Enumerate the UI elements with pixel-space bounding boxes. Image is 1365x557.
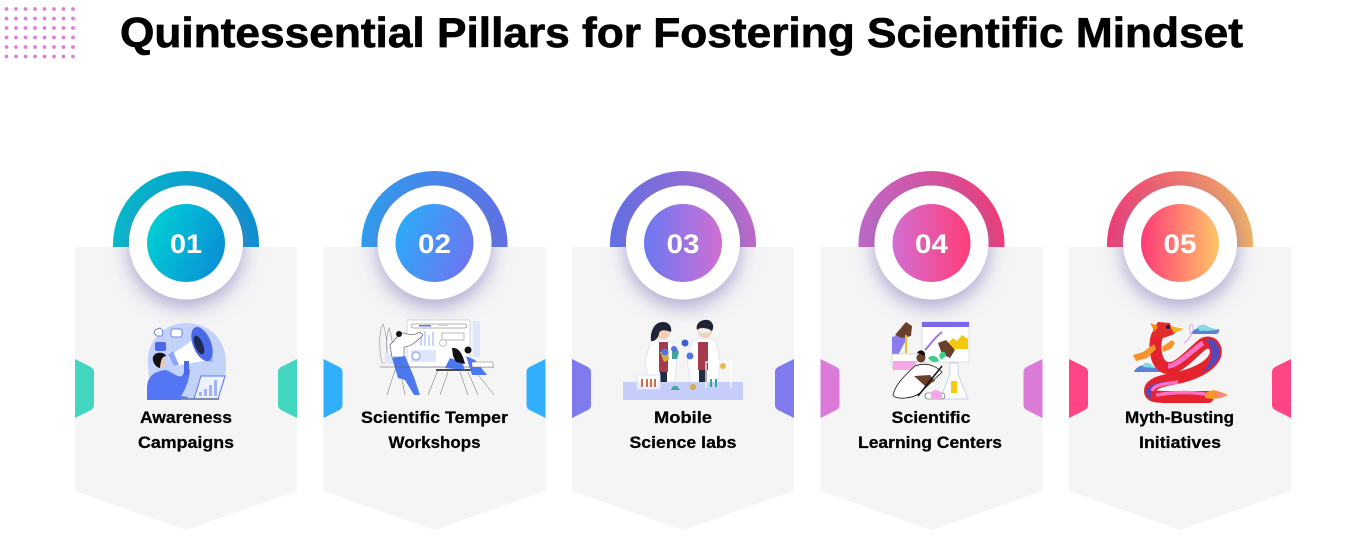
side tab right 03: [775, 359, 794, 418]
side tab right 02: [526, 359, 546, 418]
number badge 04: [874, 186, 988, 300]
icon: two scientists in a lab: [623, 320, 743, 400]
gradient arc 03: [610, 171, 756, 248]
number badge 02: 02: [418, 229, 451, 259]
number badge 02: [378, 186, 492, 300]
panel: pillar 04 scientific learning centers: [820, 171, 1042, 530]
number badge 04: 04: [915, 229, 948, 259]
icon: lab research with plant and flask: [892, 322, 969, 399]
label 01: Campaigns: [138, 434, 234, 452]
panel: pillar 01 awareness campaigns: [75, 171, 297, 530]
card 03: [572, 247, 794, 530]
label 03: Science labs: [630, 434, 736, 452]
label 03: Mobile: [654, 409, 712, 427]
title: Quintessential Pillars for Fostering Scientific Mindset: [120, 9, 1243, 56]
gradient arc 04: [858, 171, 1004, 248]
card 02: [324, 247, 546, 530]
label 01: Awareness: [140, 409, 232, 427]
card 04: [820, 247, 1042, 530]
icon: person with megaphone: [147, 323, 226, 400]
panel: pillar 03 mobile science labs: [572, 171, 794, 530]
side tab left 04: [820, 359, 840, 418]
number badge 05: [1123, 186, 1237, 300]
label 01: [138, 409, 234, 452]
side tab left 02: [324, 359, 342, 418]
panel: pillar 02 scientific temper workshops: [324, 171, 546, 530]
label 04: [858, 409, 1002, 452]
icon: workshop presentation: [380, 320, 494, 395]
number badge 01: 01: [170, 229, 202, 259]
number badge 03: 03: [666, 229, 700, 259]
gradient arc 01: [113, 171, 259, 248]
icon: dragon: [1133, 322, 1228, 399]
label 02: Scientific Temper: [361, 409, 509, 427]
side tab left 01: [75, 359, 94, 418]
side tab right 05: [1272, 359, 1291, 418]
label 04: Learning Centers: [858, 434, 1002, 452]
number badge 05: 05: [1164, 229, 1196, 259]
label 03: [630, 409, 736, 452]
side tab right 04: [1024, 359, 1042, 418]
decorative dot grid: [5, 7, 75, 58]
side tab left 05: [1069, 359, 1088, 418]
number badge 01: [129, 186, 243, 300]
label 05: Myth-Busting: [1125, 409, 1234, 427]
side tab left 03: [572, 359, 591, 418]
label 04: Scientific: [892, 409, 970, 427]
gradient arc 05: [1107, 171, 1253, 248]
label 05: Initiatives: [1139, 434, 1221, 452]
label 02: Workshops: [388, 434, 480, 452]
number badge 03: [626, 186, 740, 300]
gradient arc 02: [362, 171, 508, 248]
label 02: [361, 409, 509, 452]
panel: pillar 05 myth-busting initiatives: [1069, 171, 1291, 530]
side tab right 01: [278, 359, 297, 418]
card 05: [1069, 247, 1291, 530]
label 05: [1125, 409, 1234, 452]
card 01: [75, 247, 297, 530]
